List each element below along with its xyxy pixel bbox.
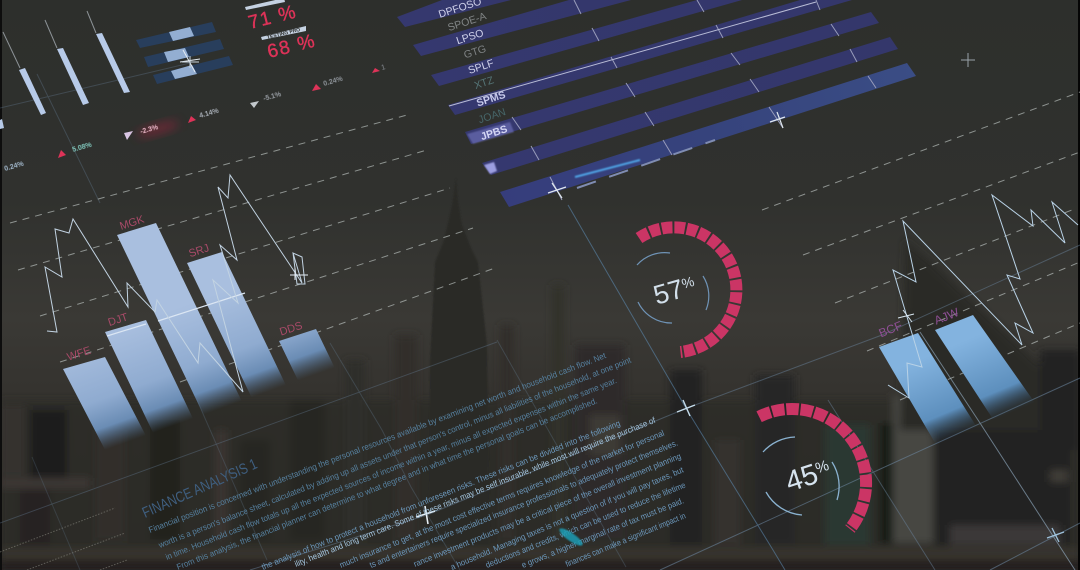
heading: FINANCE ANALYSIS 1 bbox=[140, 456, 260, 522]
donut gauge: 45% bbox=[759, 409, 866, 529]
ticker strip with triangles: -5.1% bbox=[263, 91, 283, 103]
top-left vertical bars bbox=[0, 11, 130, 129]
ticker strip with triangles: 4.14% bbox=[199, 108, 220, 120]
bright dashes across bars bbox=[577, 140, 715, 188]
column labels: DJT bbox=[107, 311, 130, 329]
gauge value: % bbox=[813, 457, 831, 477]
gauge segments bbox=[759, 409, 866, 529]
column labels: AJW bbox=[932, 305, 961, 328]
column labels: MGK bbox=[118, 213, 146, 233]
second paragraph: rance investment products may be a critical piece of the overall investment planning bbox=[412, 451, 683, 569]
right line chart bbox=[888, 195, 1078, 398]
column labels: SRJ bbox=[187, 242, 211, 260]
column labels: DDS bbox=[278, 320, 304, 338]
column bars bbox=[63, 223, 345, 469]
inner arcs bbox=[763, 437, 839, 515]
column bars bbox=[879, 315, 1040, 460]
first paragraph: worth is a person's balance sheet, calculated by adding up all assets under that person's control, minus all liabilities of the household, at one point bbox=[156, 355, 633, 550]
column labels bbox=[66, 213, 304, 364]
gauge value: % bbox=[680, 273, 696, 292]
right bar chart bbox=[877, 305, 1040, 460]
teal highlight bbox=[557, 526, 585, 548]
second paragraph: the analysis of how to protect a household from unforeseen risks. These risks can be divided into the following bbox=[260, 418, 622, 570]
first paragraph: Financial position is concerned with understanding the personal resources available by examining net worth and household cash flow. Net bbox=[147, 350, 608, 535]
crossing line bbox=[107, 293, 245, 336]
ticker strip with triangles: 5.08% bbox=[72, 142, 93, 154]
second paragraph: e grows, a higher marginal rate of tax must be paid. bbox=[520, 495, 685, 570]
gauge value: 45 bbox=[782, 458, 822, 499]
gauge segments bbox=[639, 227, 736, 352]
top-left segmented range bars bbox=[136, 22, 233, 84]
second paragraph: a household. Managing taxes is not a question of if you will pay taxes, but bbox=[449, 464, 685, 570]
horizontal bar chart: purple tickers bbox=[397, 0, 916, 207]
second paragraph: ts and entertainers require specialized insurance professionals to adequately protect themselves. bbox=[368, 438, 679, 570]
inner arcs bbox=[637, 253, 709, 323]
ticker labels: JOAN bbox=[477, 106, 507, 126]
bar ticks bbox=[449, 0, 876, 200]
testing stat: 71% and 68%: TESTING PRO bbox=[267, 27, 301, 41]
column labels bbox=[877, 305, 961, 340]
ticker labels bbox=[437, 0, 509, 143]
column labels: BCF bbox=[877, 318, 904, 340]
ticker labels: LPSO bbox=[455, 27, 485, 47]
ticker labels: SPLF bbox=[467, 57, 495, 77]
finance analysis text block bbox=[140, 350, 687, 570]
left bar chart bbox=[63, 213, 345, 469]
ticker labels: GTG bbox=[462, 43, 488, 61]
ticker labels: SPOE-A bbox=[446, 10, 488, 34]
bars bbox=[397, 0, 916, 207]
ticker strip with triangles: 0.24% bbox=[323, 76, 344, 88]
gauge value: 57 bbox=[650, 274, 687, 311]
ticker strip with triangles: 1 bbox=[381, 64, 386, 72]
ticker labels: XTZ bbox=[473, 74, 496, 92]
testing stat: 71% and 68% bbox=[245, 0, 318, 63]
dashed guide lines bbox=[10, 92, 1080, 400]
second paragraph: finances can make a significant impact in bbox=[564, 510, 687, 569]
testing stat: 71% and 68%: 71 % bbox=[246, 2, 299, 34]
second paragraph: ility, health and long term care. Some of these risks may be self insurable, while most will require the purchase of bbox=[293, 415, 657, 569]
column labels: WFE bbox=[66, 345, 93, 364]
faint dotted lines lower left bbox=[0, 508, 127, 570]
ticker labels: SPMS bbox=[475, 89, 507, 109]
ticker strip with triangles bbox=[4, 64, 386, 173]
ticker strip with triangles: -2.3% bbox=[140, 124, 160, 136]
first paragraph: From this analysis, the financial planner can determine to what degree and in what time the personal goals can be accomplished. bbox=[175, 395, 599, 570]
donut gauge: 57% bbox=[637, 227, 736, 352]
first paragraph: in time. Household cash flow totals up all the expected sources of income within a year, minus all expected expenses within the same year. bbox=[164, 375, 618, 562]
crosshair markers bbox=[182, 53, 1064, 542]
left line chart bbox=[45, 175, 305, 392]
second paragraph: much insurance to get, at the most cost effective terms requires knowledge of the market for personal bbox=[338, 428, 666, 570]
second paragraph: deductions and credits, which can be used to reduce the lifetime bbox=[484, 480, 687, 570]
ticker labels: JPBS bbox=[479, 123, 509, 143]
testing stat: 71% and 68%: 68 % bbox=[265, 31, 318, 63]
ticker strip with triangles: 0.24% bbox=[4, 161, 25, 173]
